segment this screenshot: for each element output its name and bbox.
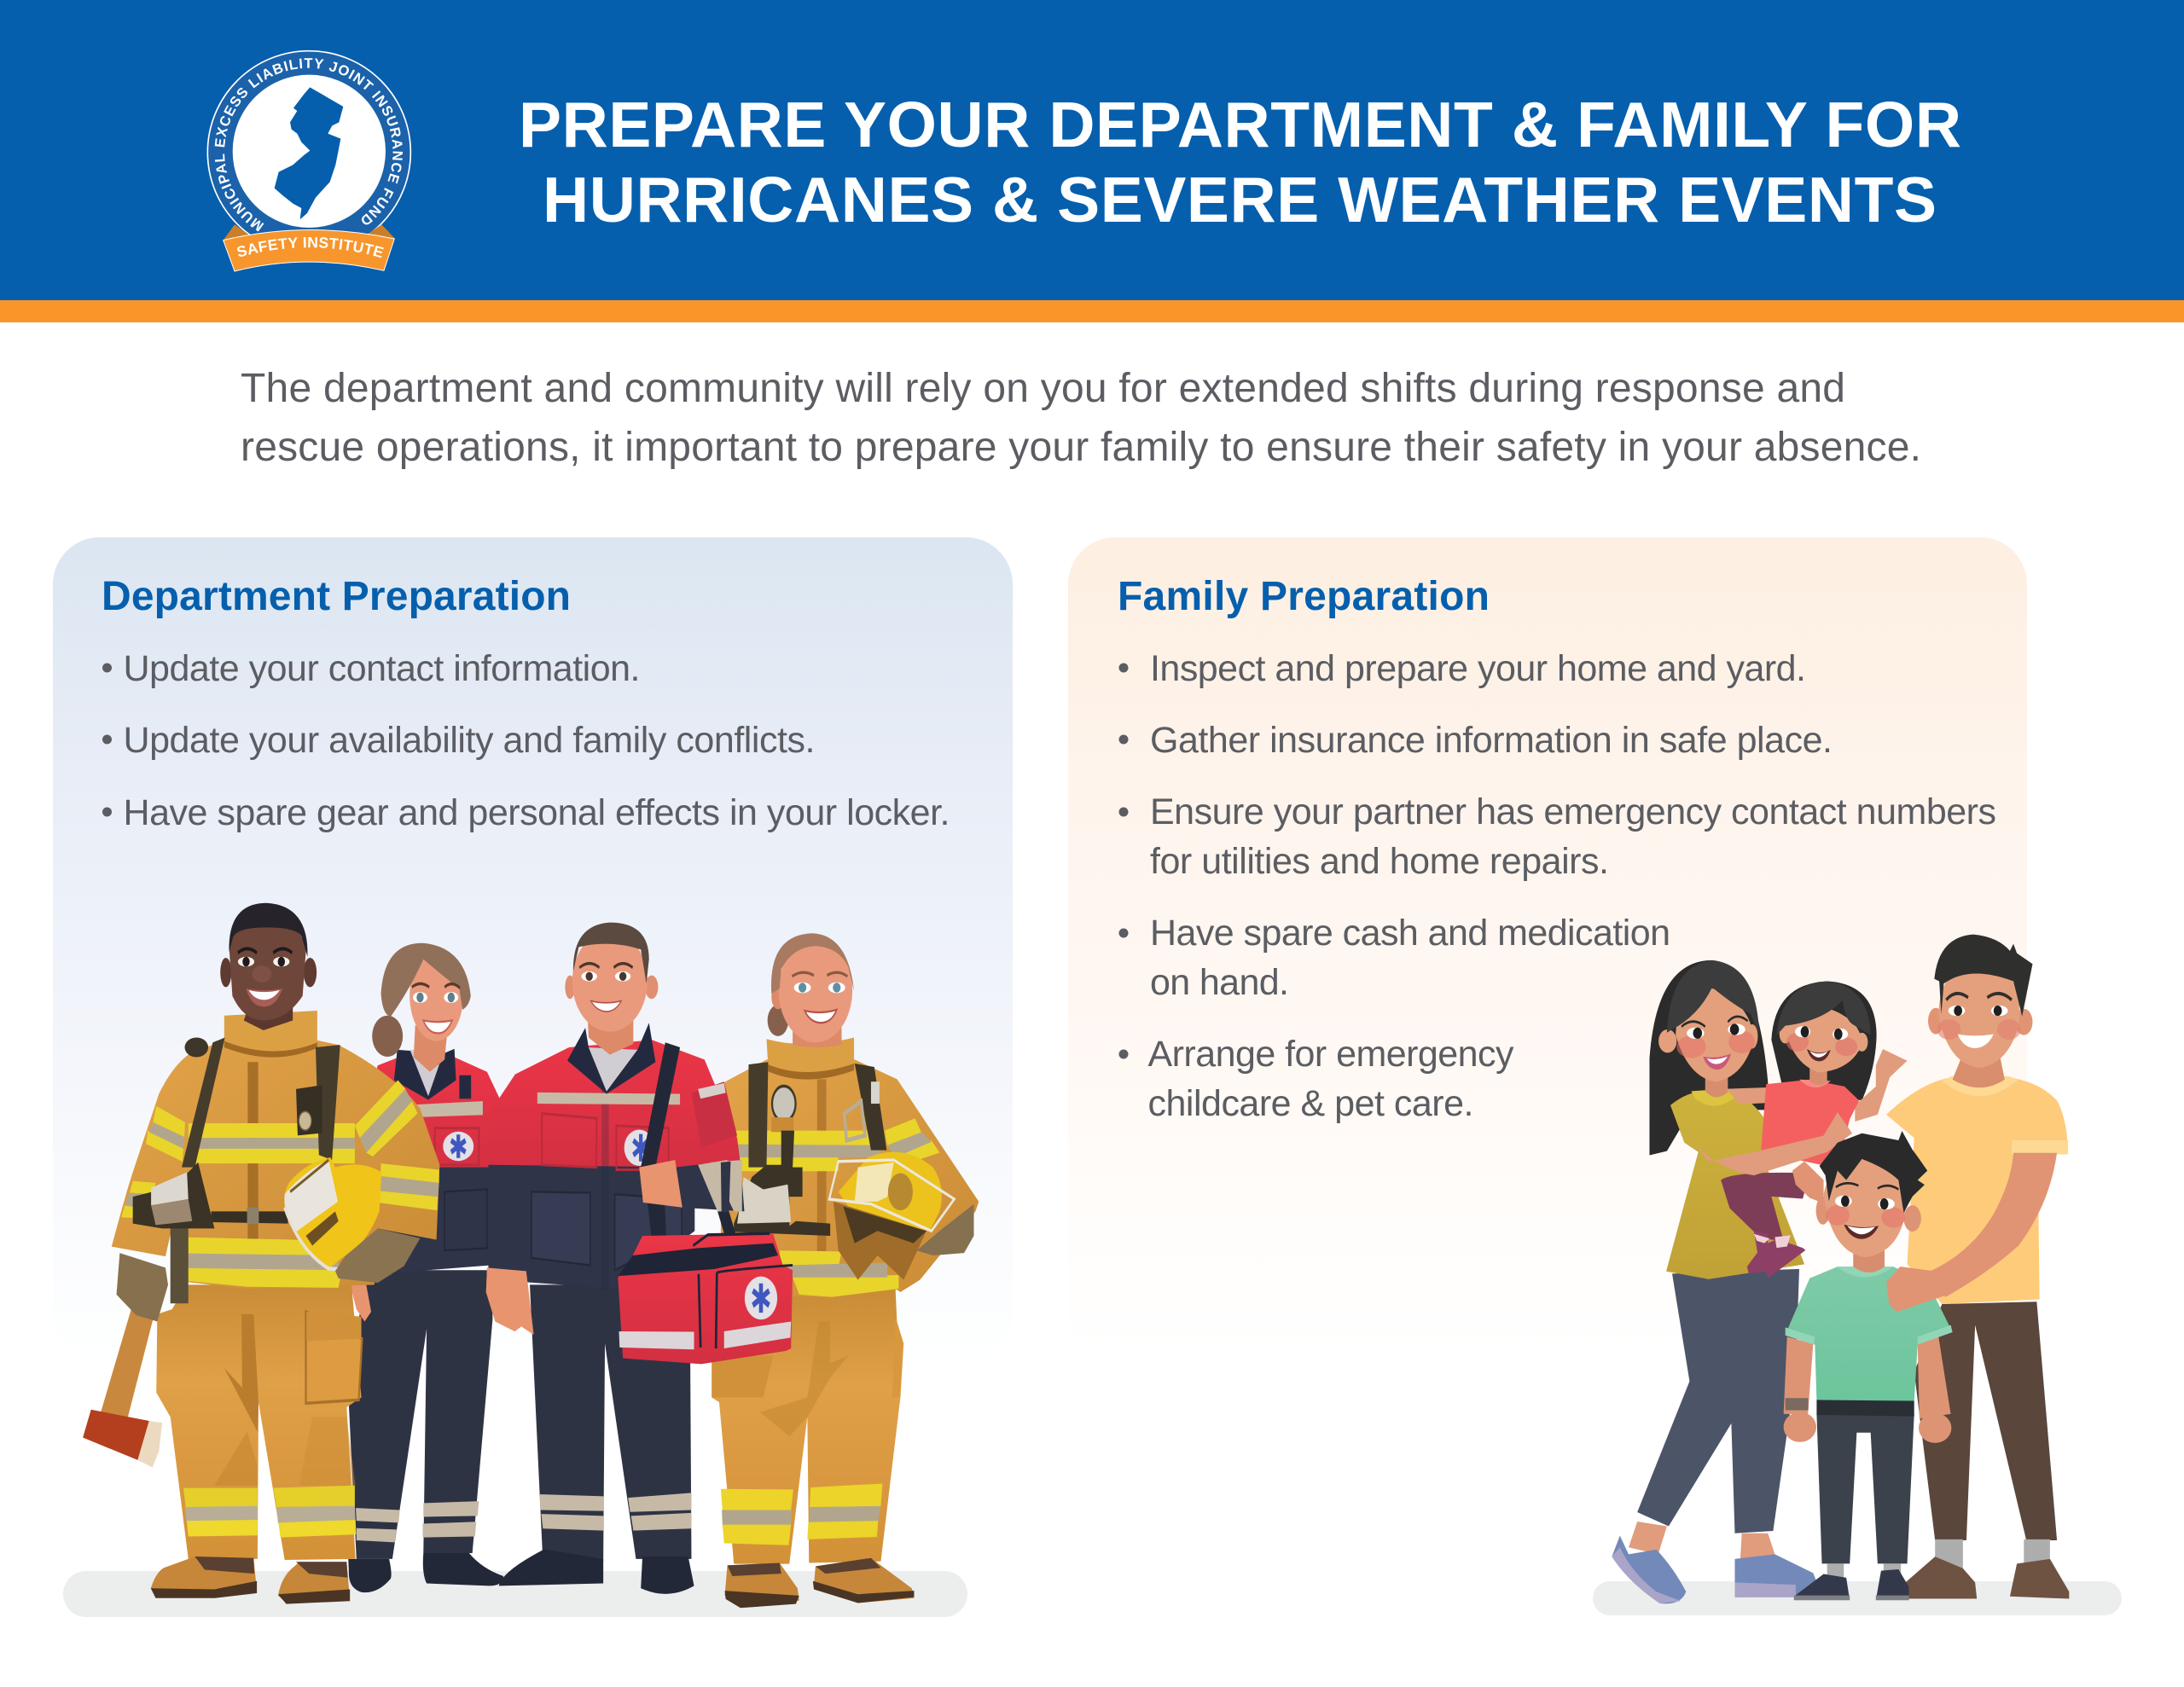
face — [1676, 1035, 1706, 1058]
arm across — [675, 1160, 744, 1211]
ribbon fold left — [224, 224, 249, 241]
figure: father — [1886, 935, 2069, 1599]
head — [588, 1016, 633, 1055]
face — [792, 972, 847, 977]
figure: firefighter with helmet — [712, 933, 979, 1608]
icon: New Jersey map — [275, 87, 343, 219]
bullet list: Inspect and prepare your home and yard. — [1150, 648, 1806, 689]
seal ring text: MUNICIPAL EXCESS LIABILITY JOINT INSURANCE FUND — [215, 58, 403, 232]
figure: mother — [1612, 960, 1820, 1603]
straps and gauge — [748, 1062, 768, 1168]
bullet list: Update your contact information. — [123, 648, 640, 689]
figure: firefighter with axe — [83, 903, 439, 1604]
bullet list — [102, 648, 950, 833]
bullet list: Arrange for emergency — [1148, 1034, 1514, 1075]
intro text: rescue operations, it important to prepare your family to ensure their safety in your absence. — [241, 425, 1921, 470]
seal ring — [207, 51, 410, 254]
title: PREPARE YOUR DEPARTMENT & FAMILY FOR — [519, 89, 1961, 160]
orange rule — [0, 300, 2184, 322]
seal white disc — [233, 75, 386, 228]
SCBA straps — [182, 1038, 225, 1168]
face — [238, 948, 292, 953]
air cylinder and belt — [212, 1211, 288, 1224]
intro text: The department and community will rely on you for extended shifts during response and — [241, 366, 1845, 411]
coat reflective stripes — [189, 1123, 355, 1163]
ribbon — [224, 230, 394, 271]
ground shadow — [63, 1571, 967, 1617]
header band — [0, 0, 2184, 301]
medical bag — [618, 1233, 793, 1364]
bullet list: on hand. — [1150, 962, 1289, 1003]
face — [412, 983, 460, 988]
bullet list: for utilities and home repairs. — [1150, 841, 1609, 882]
panel background — [1068, 537, 2027, 1359]
title — [519, 89, 1961, 235]
figure: daughter — [1721, 982, 1908, 1278]
panel: family preparation — [1068, 537, 2027, 1359]
bag strap — [641, 1042, 680, 1168]
helmet — [284, 1157, 381, 1268]
bullet list: Ensure your partner has emergency contact numbers — [1150, 791, 1996, 832]
head — [768, 1005, 788, 1036]
bullet list: childcare & pet care. — [1148, 1083, 1474, 1124]
bullet list: Update your availability and family conflicts. — [123, 720, 816, 761]
trousers — [156, 1284, 362, 1560]
figure: son — [1784, 1131, 1953, 1600]
panel: department preparation — [53, 537, 1013, 1359]
ground shadow — [1593, 1581, 2122, 1615]
bullet list — [1119, 648, 1996, 1124]
bullet list: Have spare gear and personal effects in your locker. — [123, 792, 950, 833]
bullet list: Gather insurance information in safe place. — [1150, 720, 1833, 761]
ribbon fold right — [369, 224, 395, 239]
panel background — [53, 537, 1013, 1359]
illustration: family — [1593, 935, 2122, 1615]
logo: Safety Institute seal — [206, 49, 411, 272]
face — [579, 964, 633, 967]
gloves — [335, 1228, 420, 1283]
intro text — [241, 366, 1921, 470]
panel heading: Family Preparation — [1118, 574, 1490, 619]
axe — [101, 1309, 153, 1417]
panel heading: Department Preparation — [102, 574, 571, 619]
bullet list: Have spare cash and medication — [1150, 913, 1670, 954]
title: HURRICANES & SEVERE WEATHER EVENTS — [543, 164, 1937, 235]
father's hand on daughter — [1792, 1162, 1824, 1203]
ribbon text: SAFETY INSTITUTE — [237, 237, 384, 258]
head — [244, 991, 293, 1030]
turnout coat — [112, 1040, 439, 1289]
face — [1786, 1033, 1809, 1052]
face — [1937, 1019, 1960, 1040]
boots — [151, 1557, 257, 1598]
father's hand on son's shoulder — [1886, 1267, 1946, 1312]
mother's arm holding daughter — [1691, 1112, 1852, 1175]
illustration: first responders — [63, 903, 979, 1617]
helmet — [839, 1152, 942, 1231]
face — [1826, 1205, 1850, 1226]
figure: female paramedic — [348, 943, 534, 1592]
male paramedic lowered hand — [486, 1267, 534, 1335]
figure: male paramedic — [488, 923, 793, 1594]
